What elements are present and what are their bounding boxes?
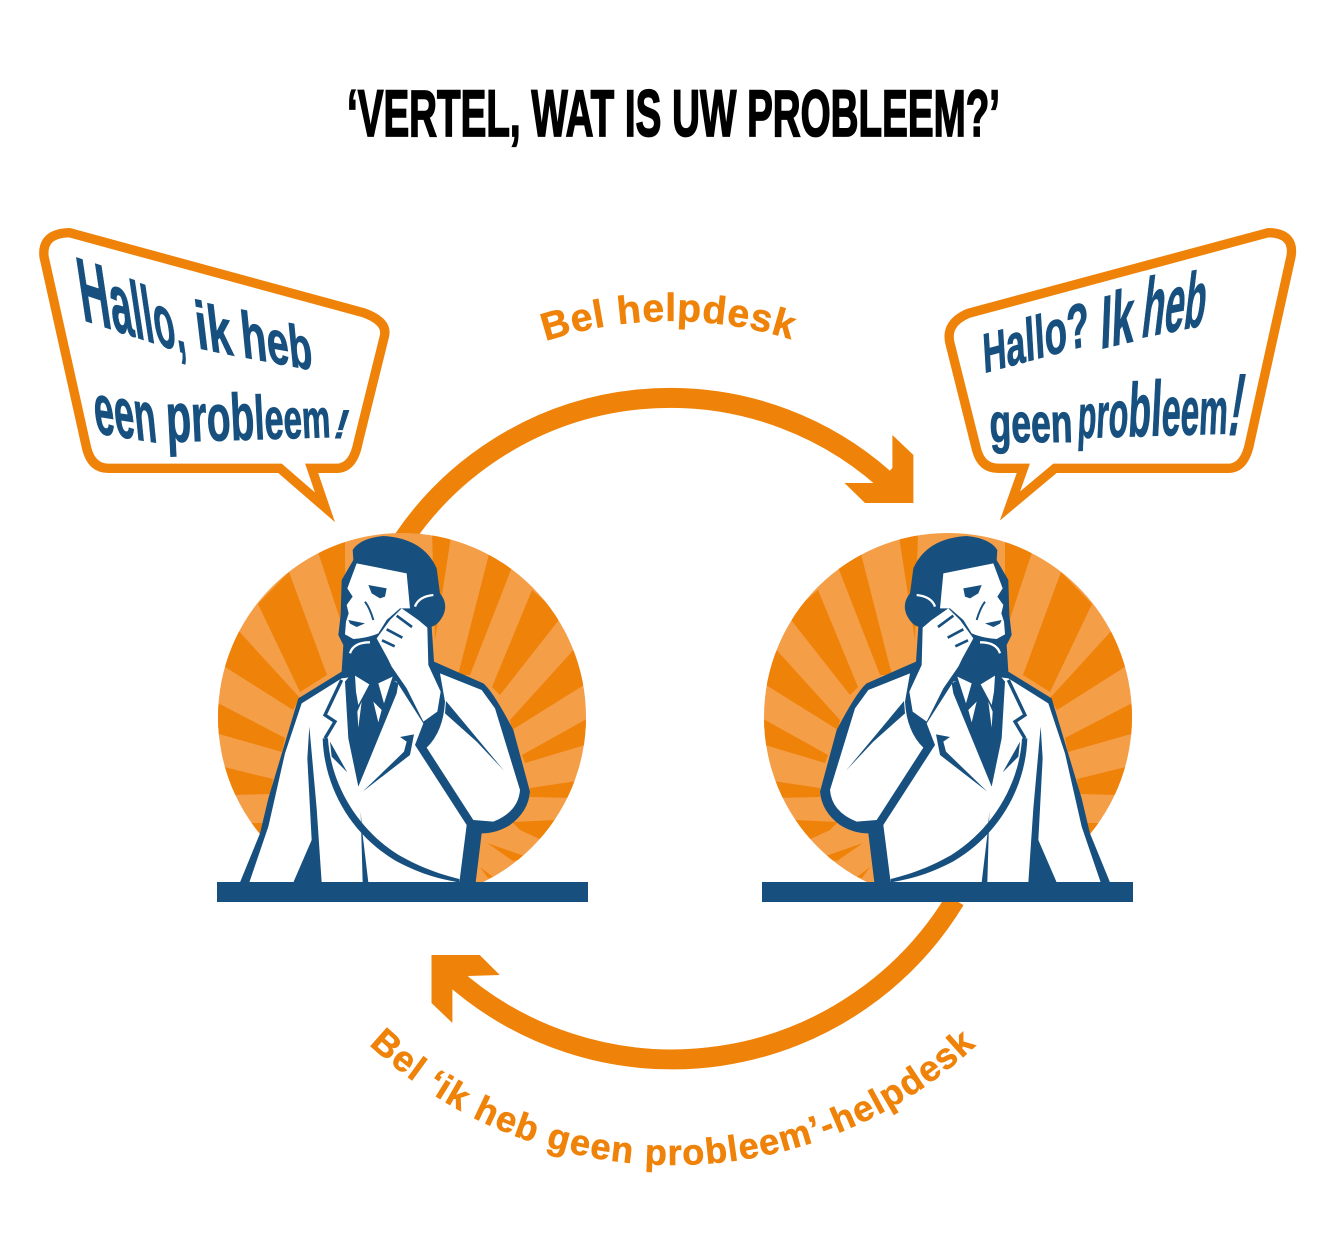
- phone mouthpiece: [345, 641, 390, 670]
- bubble text: hallo ik heb: probleem: [164, 374, 332, 457]
- illustration: right helpdesk man with sunburst (mirrored): [750, 525, 1140, 905]
- arrow: bel helpdesk (top): [403, 398, 913, 540]
- illustration: left helpdesk man with sunburst: [210, 525, 600, 905]
- silhouette: [240, 536, 530, 882]
- left lapel: [325, 680, 342, 738]
- arrow: bel ik heb geen probleem helpdesk (bottom): [432, 900, 955, 1059]
- man: [240, 536, 530, 882]
- bubble text: hallo ik heb geen: Ik: [1099, 272, 1136, 366]
- bubble text: hallo ik heb: !: [329, 403, 354, 447]
- bubble text: hallo ik heb geen: heb: [1138, 250, 1213, 357]
- label: bel ik heb geen probleem helpdesk: Bel ‘ik heb geen probleem’-helpdesk: [370, 1027, 977, 1172]
- face: [345, 563, 410, 639]
- speech bubble: left: [44, 233, 385, 507]
- hand: [377, 608, 441, 722]
- coat edge curve: [323, 738, 459, 882]
- desk: [217, 882, 588, 902]
- phone earpiece: [412, 589, 444, 621]
- bubble text: hallo ik heb geen: Hallo?: [981, 289, 1091, 387]
- coat centre line: [361, 812, 368, 882]
- speech bubble: right: [949, 233, 1291, 506]
- bubble text: hallo ik heb: een: [90, 369, 160, 459]
- bubble text: hallo ik heb: Hallo,: [70, 236, 190, 374]
- sunburst circle: [210, 525, 600, 905]
- bubble text: hallo ik heb geen: geen: [989, 392, 1073, 454]
- arm: [427, 673, 520, 822]
- bubble text: hallo ik heb: heb: [237, 298, 315, 385]
- vest V: [345, 672, 398, 787]
- bubble text: hallo ik heb: ik: [191, 287, 236, 371]
- bubble text: hallo ik heb geen: [981, 250, 1253, 455]
- coat: [249, 675, 467, 882]
- right lapel: [363, 734, 414, 792]
- label: bel helpdesk: Bel helpdesk: [540, 292, 797, 341]
- shirt collar: [355, 676, 393, 728]
- bubble text: hallo ik heb geen: !: [1223, 356, 1253, 454]
- coat fold: [293, 727, 322, 882]
- bubble text: hallo ik heb: [70, 236, 354, 459]
- bubble text: hallo ik heb geen: probleem: [1076, 363, 1231, 455]
